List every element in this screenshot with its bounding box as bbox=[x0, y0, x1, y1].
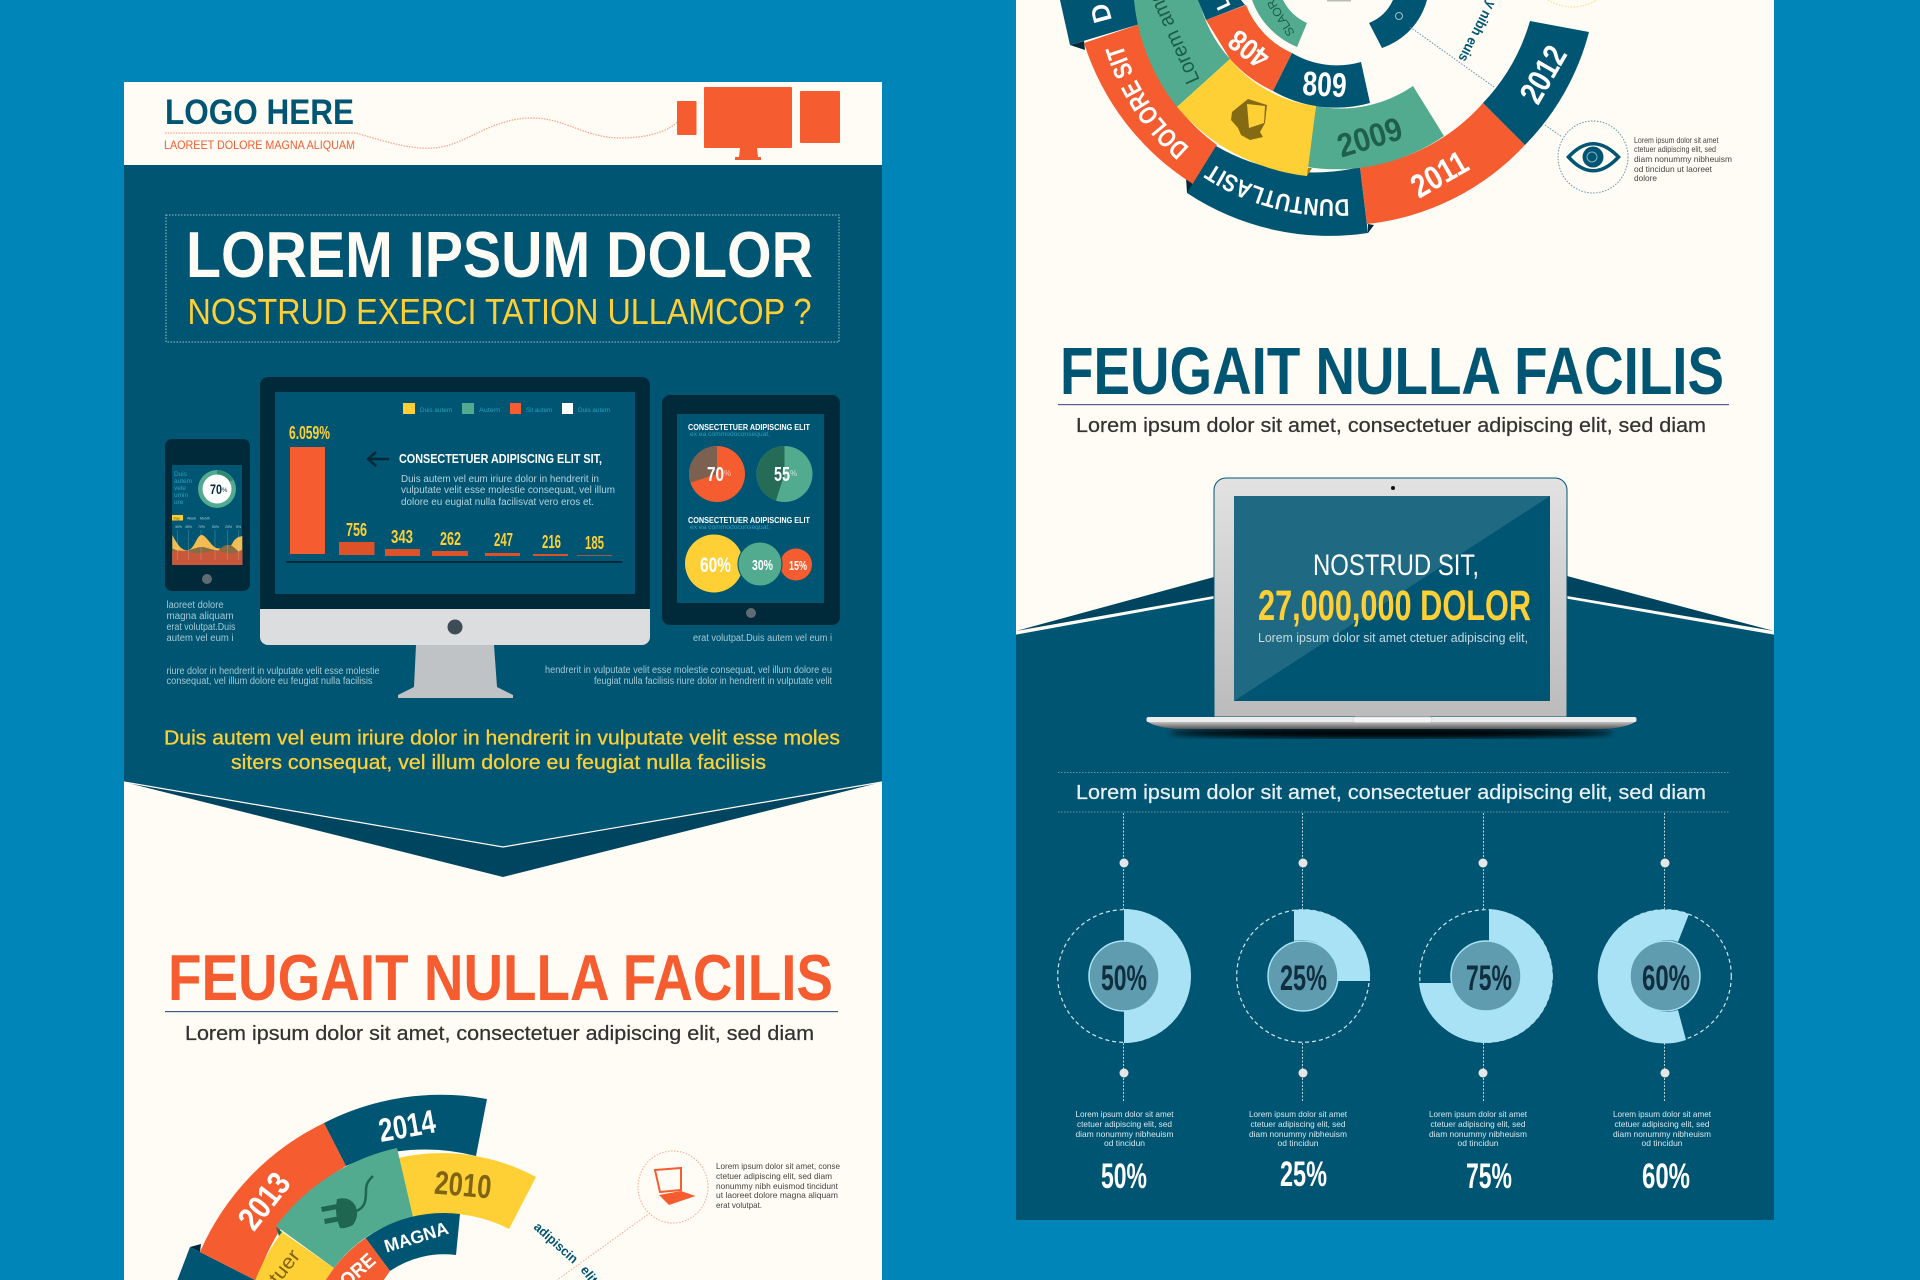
captions around devices: laoreet dolore bbox=[166, 600, 224, 611]
chart: 60% donut: 60% bbox=[1642, 959, 1690, 998]
callout: eye: Lorem ipsum dolor sit amet bbox=[1634, 135, 1719, 145]
ring labels: 2013 bbox=[230, 1165, 298, 1237]
laptop screen text: NOSTRUD SIT, bbox=[1313, 549, 1479, 582]
chart: 60% donut: diam nonummy nibheuism bbox=[1613, 1129, 1711, 1139]
section subheading bbox=[1058, 772, 1730, 812]
captions around devices: riure dolor in hendrerit in vulputate velit esse molestie bbox=[166, 666, 380, 677]
ring labels: 2009 bbox=[1333, 110, 1407, 164]
chart legend: Sit autem bbox=[526, 407, 552, 414]
chart: 75% donut: ctetuer adipiscing elit, sed bbox=[1430, 1119, 1526, 1129]
heading: orange section title: FEUGAIT NULLA FACILIS bbox=[168, 941, 833, 1014]
captions around devices: magna aliquam bbox=[166, 611, 234, 622]
bubbles: 15% bbox=[789, 558, 807, 573]
chart: 25% donut: 25% bbox=[1280, 959, 1327, 998]
header: logo: LAOREET DOLORE MAGNA ALIQUAM bbox=[164, 138, 355, 152]
yellow statement bbox=[164, 728, 840, 774]
title box: NOSTRUD EXERCI TATION ULLAMCOP ? bbox=[188, 291, 812, 332]
yellow statement: siters consequat, vel illum dolore eu feugiat nulla facilisis bbox=[231, 752, 766, 774]
icon: monitor bbox=[1231, 99, 1267, 140]
laptop screen text: Lorem ipsum dolor sit amet ctetuer adipiscing elit, bbox=[1258, 630, 1528, 645]
ring labels: MAGNA bbox=[382, 1218, 451, 1256]
heading: navy section title: FEUGAIT NULLA FACILIS bbox=[1060, 334, 1724, 409]
device: laptop bbox=[1146, 478, 1636, 738]
header: logo bbox=[164, 99, 677, 152]
chart: 50% donut bbox=[1058, 813, 1191, 1196]
chart: radial timeline upper half bbox=[177, 1095, 601, 1280]
progress ring: % bbox=[222, 488, 228, 494]
device: phone with area chart: umin bbox=[174, 492, 188, 499]
device: phone with area chart: ure bbox=[174, 499, 184, 506]
chart: 25% donut: ctetuer adipiscing elit, sed bbox=[1250, 1119, 1346, 1129]
header: logo: LOGO HERE bbox=[165, 93, 354, 132]
device: phone with area chart: Month bbox=[200, 516, 210, 520]
chart: 25% donut bbox=[1237, 813, 1370, 1194]
bar values: 247 bbox=[494, 530, 513, 550]
ring labels: 2014 bbox=[376, 1102, 439, 1149]
ring labels: DUNTUTLASIT bbox=[1204, 166, 1348, 216]
chart: 50% donut: od tincidun bbox=[1104, 1138, 1145, 1148]
bar values: 216 bbox=[542, 532, 561, 552]
ring labels: 2011 bbox=[1404, 143, 1474, 205]
chart legend: Duis autem bbox=[578, 407, 610, 414]
chart legend: Duis autem bbox=[420, 407, 452, 414]
chart legend: Autem bbox=[479, 407, 500, 414]
chart: 60% donut: ctetuer adipiscing elit, sed bbox=[1614, 1119, 1710, 1129]
bar values: 756 bbox=[346, 520, 367, 540]
device: phone with area chart: 45% bbox=[185, 525, 192, 529]
captions around devices: consequat, vel illum dolore eu feugiat nulla facilisis bbox=[166, 676, 372, 687]
device: phone with area chart: 30% bbox=[175, 525, 182, 529]
device: phone with area chart: Week bbox=[187, 516, 196, 520]
bubbles: 60% bbox=[700, 554, 731, 577]
device: tablet with pie charts: CONSECTETUER ADIPISCING ELIT bbox=[688, 516, 810, 525]
yellow statement: Duis autem vel eum iriure dolor in hendrerit in vulputate velit esse moles bbox=[164, 728, 840, 750]
device: phone with area chart: vele bbox=[174, 485, 186, 492]
chart: 75% donut: 75% bbox=[1466, 959, 1512, 998]
chart: 60% donut: 60% bbox=[1642, 1157, 1690, 1196]
bar values: 185 bbox=[585, 533, 604, 553]
ring labels: y nibh euis bbox=[1455, 0, 1500, 65]
heading: navy section title bbox=[1058, 334, 1729, 437]
pie: 70%: 70 bbox=[707, 464, 724, 486]
area chart bbox=[172, 530, 242, 565]
ring labels bbox=[230, 1102, 601, 1280]
screen text: vulputate velit esse molestie consequat, vel illum bbox=[401, 485, 615, 496]
callout: eye: od tincidun ut laoreet bbox=[1634, 164, 1713, 174]
device: tablet with pie charts: CONSECTETUER ADIPISCING ELIT bbox=[688, 423, 810, 432]
icon: plug bbox=[321, 1176, 373, 1228]
captions around devices bbox=[166, 600, 832, 687]
ring labels: DOLORE SIT bbox=[1105, 48, 1189, 160]
device: desktop monitor with bar chart bbox=[260, 377, 650, 698]
arrow bbox=[368, 452, 389, 466]
device: phone with area chart: 20% bbox=[225, 525, 232, 529]
panel: right page bbox=[1016, 0, 1774, 1220]
device: tablet with pie charts bbox=[662, 395, 840, 625]
chart: 60% donut bbox=[1598, 813, 1731, 1196]
pie: 55% bbox=[756, 446, 812, 502]
heading: orange section title bbox=[165, 954, 838, 1044]
callout: eye: diam nonummy nibheuism bbox=[1634, 154, 1732, 164]
captions around devices: erat volutpat.Duis bbox=[166, 622, 236, 633]
ring labels bbox=[1084, 0, 1574, 216]
device: phone with area chart: Duis bbox=[174, 471, 188, 478]
device: phone with area chart: 5% bbox=[236, 525, 241, 529]
chart: 25% donut: diam nonummy nibheuism bbox=[1249, 1129, 1347, 1139]
ring labels: 2010 bbox=[433, 1164, 493, 1205]
ring labels: 408 bbox=[1223, 23, 1276, 74]
screen text bbox=[399, 451, 615, 508]
screen text: Duis autem vel eum iriure dolor in hendrerit in bbox=[401, 474, 599, 485]
pie: 55%: % bbox=[790, 469, 797, 478]
callout: laptop: nonummy nibh euismod tincidunt bbox=[716, 1181, 839, 1191]
ring labels: 2012 bbox=[1512, 39, 1574, 109]
captions around devices: autem vel eum i bbox=[166, 633, 234, 644]
progress ring bbox=[198, 470, 236, 508]
callout: eye: ctetuer adipiscing elit, sed bbox=[1634, 144, 1716, 154]
pie: 55%: 55 bbox=[774, 464, 790, 486]
bar values bbox=[289, 423, 604, 553]
panel: blue hero section bbox=[124, 165, 882, 877]
heading: orange section title: Lorem ipsum dolor sit amet, consectetuer adipiscing elit, sed diam bbox=[185, 1023, 814, 1045]
device: phone with area chart: 70% bbox=[198, 525, 205, 529]
device: tablet with pie charts: ex ea commodoconsequat, bbox=[690, 524, 770, 531]
captions around devices: hendrerit in vulputate velit esse molestie consequat, vel illum dolore eu bbox=[545, 665, 832, 676]
title box bbox=[166, 215, 839, 342]
chart: 75% donut: Lorem ipsum dolor sit amet bbox=[1429, 1109, 1528, 1119]
bar values: 262 bbox=[440, 529, 461, 549]
chart: 75% donut bbox=[1419, 813, 1553, 1196]
callout: eye: dolore bbox=[1634, 173, 1657, 183]
captions around devices: feugiat nulla facilisis riure dolor in hendrerit in vulputate velit bbox=[594, 676, 832, 687]
laptop screen text bbox=[1258, 549, 1531, 645]
callout: laptop: ut laoreet dolore magna aliquam bbox=[716, 1190, 838, 1200]
chart: 25% donut: od tincidun bbox=[1278, 1138, 1319, 1148]
laptop screen text: 27,000,000 DOLOR bbox=[1258, 582, 1531, 630]
callout: laptop: ctetuer adipiscing elit, sed diam bbox=[716, 1171, 832, 1181]
progress ring: 70 bbox=[210, 481, 222, 497]
screen text: dolore eu eugiat nulla facilisvat vero eros et. bbox=[401, 497, 594, 508]
icon: orange devices bbox=[677, 87, 840, 160]
chart: 25% donut: Lorem ipsum dolor sit amet bbox=[1249, 1109, 1348, 1119]
section subheading: Lorem ipsum dolor sit amet, consectetuer adipiscing elit, sed diam bbox=[1076, 782, 1706, 804]
captions around devices: erat volutpat.Duis autem vel eum i bbox=[693, 633, 832, 644]
chart: 75% donut: od tincidun bbox=[1458, 1138, 1499, 1148]
ring labels: 809 bbox=[1302, 65, 1348, 105]
callout: eye bbox=[1410, 27, 1732, 193]
bar values: 6.059% bbox=[289, 423, 330, 443]
chart: 50% donut: 50% bbox=[1101, 1157, 1147, 1196]
callout: laptop bbox=[557, 1151, 840, 1280]
chart: 60% donut: Lorem ipsum dolor sit amet bbox=[1613, 1109, 1712, 1119]
device: tablet with pie charts: ex ea commodoconsequat, bbox=[690, 431, 770, 438]
chart: 50% donut: diam nonummy nibheuism bbox=[1076, 1129, 1174, 1139]
icon: laptop bbox=[655, 1168, 696, 1205]
ring labels: adipiscin bbox=[531, 1219, 581, 1266]
callout: laptop: erat volutpat. bbox=[716, 1200, 762, 1210]
bars bbox=[286, 447, 622, 563]
device: phone with area chart: autem bbox=[174, 478, 192, 485]
bubbles bbox=[685, 534, 812, 592]
chart: radial timeline lower half bbox=[1060, 0, 1598, 236]
panel: left page bbox=[124, 82, 882, 1280]
icon: eye bbox=[1566, 142, 1621, 172]
callout: laptop: Lorem ipsum dolor sit amet, conse bbox=[716, 1161, 840, 1171]
screen text: CONSECTETUER ADIPISCING ELIT SIT, bbox=[399, 451, 602, 466]
bubbles: 30% bbox=[752, 557, 773, 574]
chart: 50% donut: 50% bbox=[1101, 959, 1147, 998]
ring labels: D bbox=[1084, 0, 1118, 26]
chart: 60% donut: od tincidun bbox=[1642, 1138, 1683, 1148]
heading: navy section title: Lorem ipsum dolor sit amet, consectetuer adipiscing elit, sed diam bbox=[1076, 415, 1706, 437]
chart legend bbox=[403, 403, 610, 414]
pie: 70% bbox=[689, 446, 745, 502]
title box: LOREM IPSUM DOLOR bbox=[186, 218, 813, 291]
bar values: 343 bbox=[391, 527, 413, 547]
pie: 70%: % bbox=[724, 469, 731, 478]
device: phone with area chart bbox=[165, 439, 250, 591]
panel: blue lower section bbox=[1016, 576, 1774, 1220]
chart: 50% donut: ctetuer adipiscing elit, sed bbox=[1077, 1119, 1172, 1129]
chart: 25% donut: 25% bbox=[1280, 1155, 1327, 1194]
device: phone with area chart: Day bbox=[174, 516, 180, 520]
chart: 75% donut: 75% bbox=[1466, 1157, 1512, 1196]
device: phone with area chart: 50% bbox=[212, 525, 219, 529]
chart: 50% donut: Lorem ipsum dolor sit amet bbox=[1076, 1109, 1174, 1119]
chart: 75% donut: diam nonummy nibheuism bbox=[1429, 1129, 1527, 1139]
